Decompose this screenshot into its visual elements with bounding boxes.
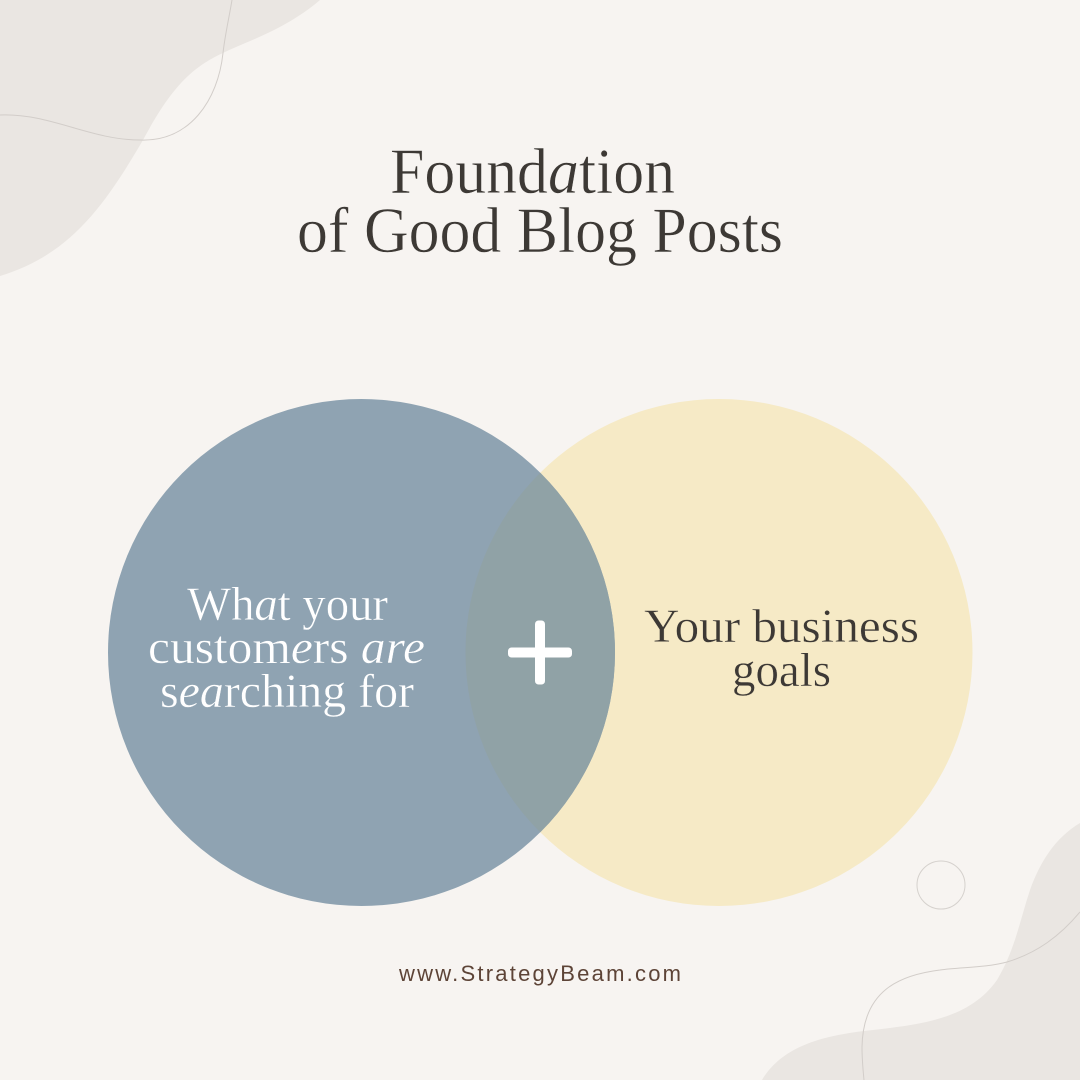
title line 2: of Good Blog Posts [297, 195, 783, 267]
decorative blob: top left [0, 0, 320, 276]
left text line 1: What your [187, 578, 388, 631]
title [297, 136, 783, 267]
circle overlap [466, 472, 615, 832]
circle: customer searches [108, 399, 615, 906]
text: what your customers are searching for [148, 578, 425, 718]
decorative ring [917, 861, 965, 909]
icon: plus sign [508, 620, 572, 684]
venn diagram [108, 399, 972, 906]
text: your business goals [644, 600, 919, 697]
title line 1: Foundation [390, 136, 675, 208]
decorative curve: top left [0, 0, 232, 140]
footer url: www.StrategyBeam.com [398, 961, 681, 986]
right text line 1: Your business [644, 600, 919, 653]
right text line 2: goals [732, 644, 831, 697]
decorative curve: bottom right [862, 912, 1080, 1080]
left text line 3: searching for [160, 665, 414, 718]
left text line 2: customers are [148, 621, 425, 674]
circle: your business goals [466, 399, 972, 906]
decorative blob: bottom right [762, 823, 1080, 1080]
